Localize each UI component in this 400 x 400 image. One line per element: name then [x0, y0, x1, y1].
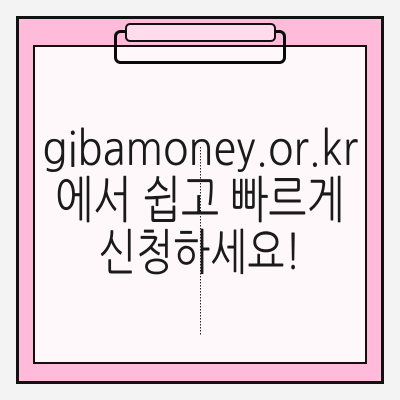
- title text: gibamoney.or.kr: [42, 124, 358, 172]
- white paper: [34, 46, 366, 363]
- clip back: [116, 32, 284, 62]
- title text: 신청하세요!: [99, 227, 301, 277]
- title text: 에서 쉽고 빠르게: [55, 174, 345, 225]
- clip front: [126, 24, 275, 41]
- dotted centre line: [200, 147, 202, 335]
